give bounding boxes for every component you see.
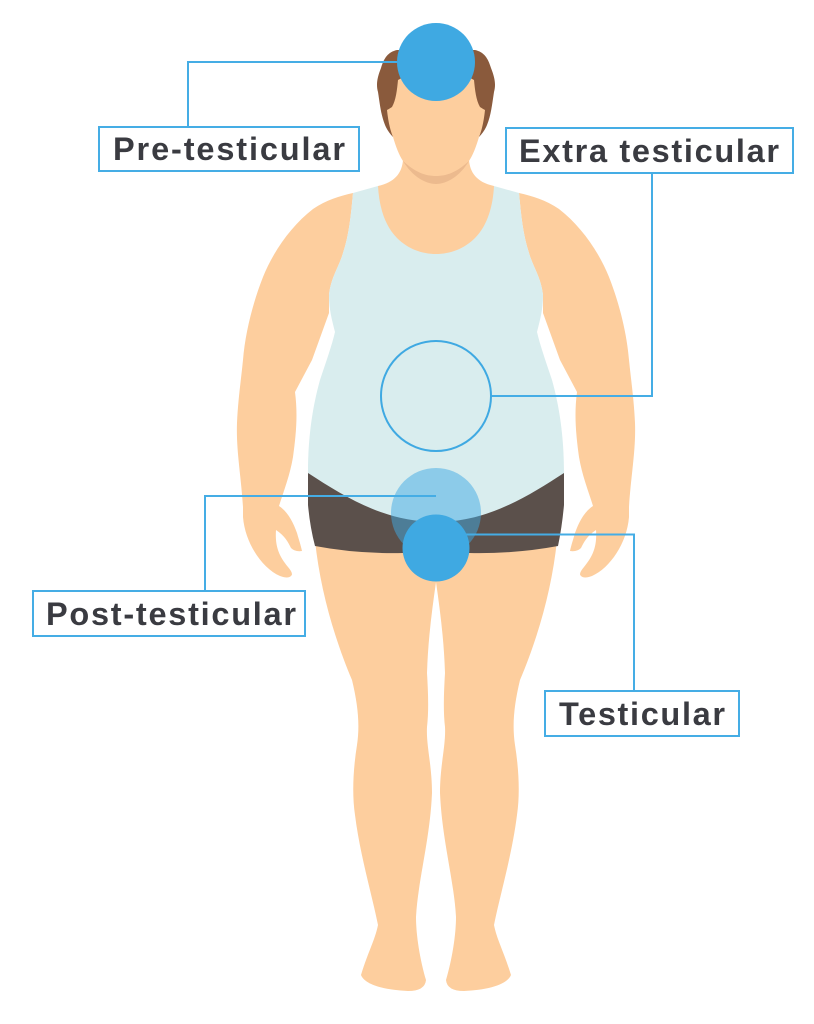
connector: extra testicular	[491, 173, 652, 396]
label: Post-testicular: Post-testicular	[46, 596, 296, 632]
tank top	[308, 186, 564, 530]
label: Testicular	[545, 691, 739, 736]
neck and chest	[378, 160, 494, 262]
connector: testicular	[466, 534, 634, 691]
label: Pre-testicular: Pre-testicular	[113, 131, 345, 167]
figure: male body	[237, 50, 635, 991]
left leg	[315, 540, 436, 991]
neck shadow	[403, 150, 469, 184]
connector: post-testicular	[205, 496, 436, 591]
right arm	[519, 193, 635, 578]
left arm	[237, 193, 353, 578]
shorts	[308, 473, 564, 553]
marker: testicular circle	[402, 514, 470, 582]
marker: head circle	[397, 23, 475, 101]
marker: abdomen circle	[381, 341, 491, 451]
right leg	[436, 540, 557, 991]
label: Extra testicular: Extra testicular	[519, 133, 779, 169]
face	[387, 60, 485, 176]
marker: post-testicular circle	[391, 468, 481, 558]
connector: pre-testicular	[188, 62, 398, 126]
hair	[377, 50, 495, 137]
label: Testicular: Testicular	[559, 696, 725, 732]
